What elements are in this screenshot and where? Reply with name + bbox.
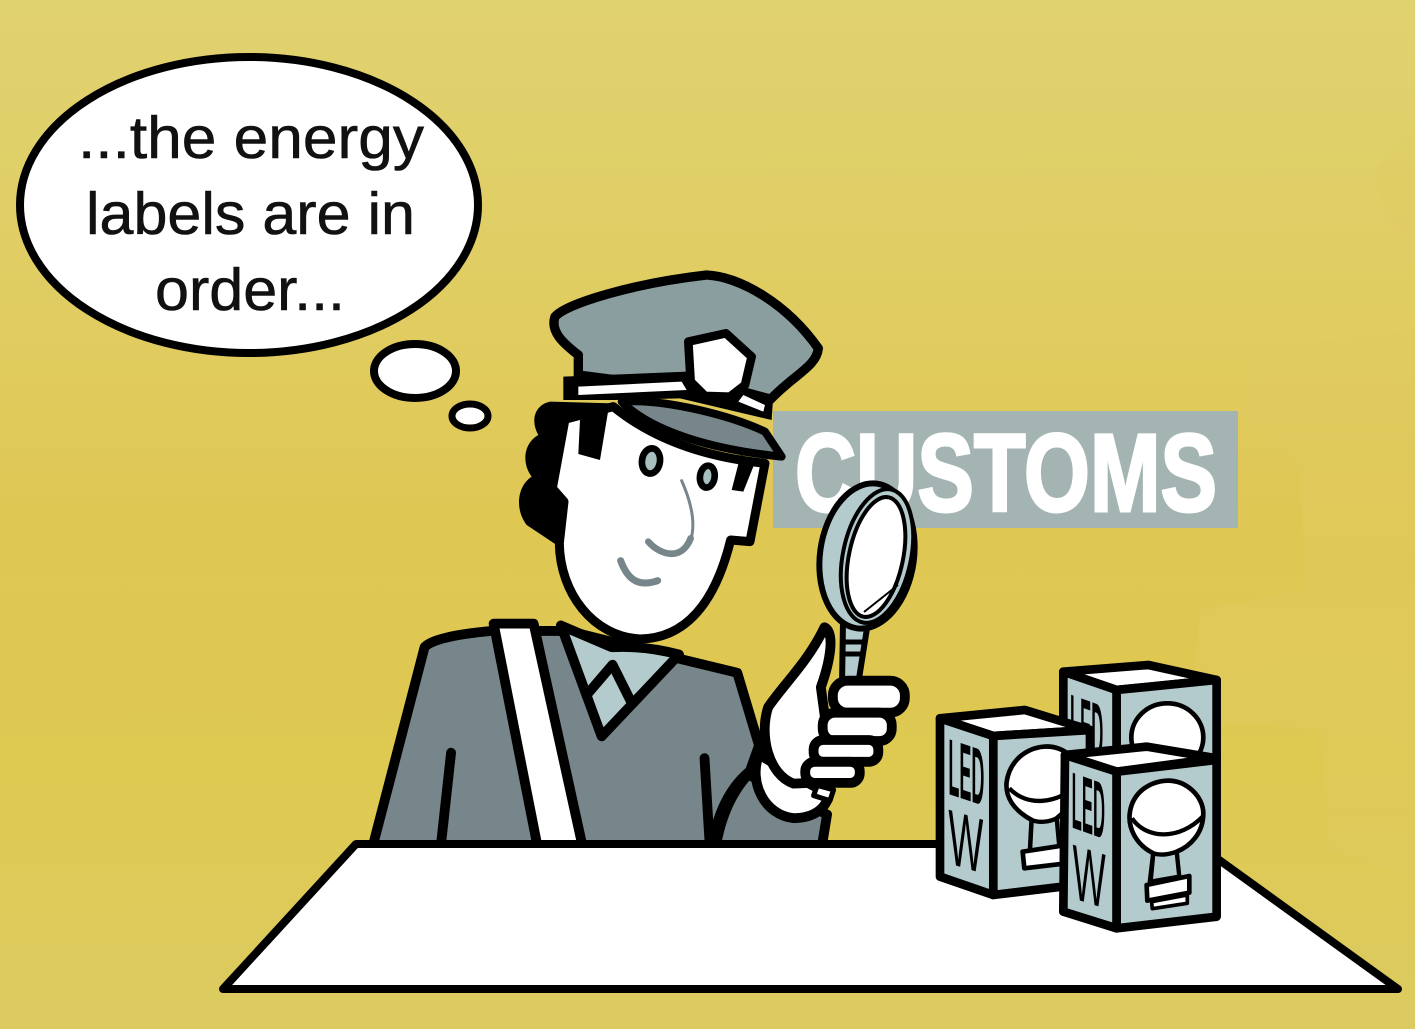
jacket [368, 631, 759, 864]
back box front [1117, 680, 1217, 760]
handle rings [840, 642, 866, 654]
hat visor [622, 401, 782, 457]
front box bulb neck [1151, 852, 1179, 882]
hat band [563, 372, 773, 420]
bubble text: labels are in [86, 181, 415, 247]
front box [1063, 747, 1217, 928]
bubble text: ...the energy [78, 105, 425, 171]
right eye [699, 465, 716, 489]
left box side [940, 718, 993, 895]
bubble: small thought dot [452, 404, 488, 428]
left box bulb base [1023, 845, 1067, 868]
front box bulb base [1147, 876, 1189, 901]
lens highlight line [864, 585, 898, 612]
front box top [1065, 747, 1217, 772]
back box bulb [1131, 703, 1203, 771]
background: faint gear shape [1190, 130, 1415, 880]
hat band white stripe right [738, 395, 765, 412]
customs sign [773, 411, 1238, 535]
ring finger [814, 740, 878, 762]
bubble: main thought ellipse [20, 57, 478, 353]
back box top [1063, 665, 1217, 690]
face [552, 407, 765, 639]
left sideburn [578, 410, 608, 460]
handle end [814, 785, 834, 801]
LED boxes [940, 665, 1217, 928]
lens inner ring [837, 492, 915, 622]
hat badge [688, 333, 752, 397]
lens frame [810, 477, 924, 635]
nose [648, 481, 693, 554]
middle finger [823, 713, 892, 741]
hat crown [554, 275, 818, 400]
front box bulb inner arc [1132, 817, 1203, 834]
shirt collar [561, 625, 679, 736]
back box side [1063, 672, 1117, 757]
left box [940, 710, 1090, 895]
white shoulder strap [494, 624, 586, 864]
back box [1063, 665, 1217, 779]
officer body [368, 624, 827, 864]
thumb and palm [765, 627, 834, 784]
front box bulb [1130, 781, 1203, 882]
table [223, 844, 1398, 989]
front box label LED: LED [1072, 757, 1105, 857]
left box label LED: LED [948, 722, 984, 824]
index finger [833, 681, 905, 713]
left box front [993, 730, 1090, 895]
lens outer ring [830, 482, 924, 630]
front box side [1063, 755, 1117, 928]
right sideburn [732, 455, 756, 492]
handle [842, 622, 868, 685]
sign background [773, 411, 1238, 528]
left box bulb [1006, 747, 1080, 852]
front box label W: W [1073, 828, 1106, 925]
back box label: LED [1070, 679, 1103, 779]
front box bulb base stripe [1152, 895, 1187, 909]
officer head [519, 275, 818, 639]
sign text: CUSTOMS [795, 412, 1217, 535]
little finger [805, 762, 860, 783]
bubble text [78, 105, 425, 323]
left box label W: W [948, 794, 983, 891]
jacket arm creases [439, 753, 711, 862]
sleeve [714, 775, 827, 864]
front box front [1117, 760, 1217, 928]
left box bulb inner arc [1009, 783, 1079, 801]
left eye [640, 447, 662, 475]
hat band white stripe left [578, 382, 687, 395]
speech bubble [20, 57, 488, 428]
hair [519, 402, 613, 545]
left box bulb neck [1030, 818, 1059, 852]
bubble: medium thought dot [374, 344, 456, 398]
magnifying glass [810, 477, 924, 685]
officer hand [756, 627, 905, 818]
left box top [940, 710, 1090, 736]
bubble text: order... [155, 257, 345, 323]
mouth [621, 561, 658, 583]
cuff [756, 755, 829, 818]
tie lines [586, 665, 631, 701]
